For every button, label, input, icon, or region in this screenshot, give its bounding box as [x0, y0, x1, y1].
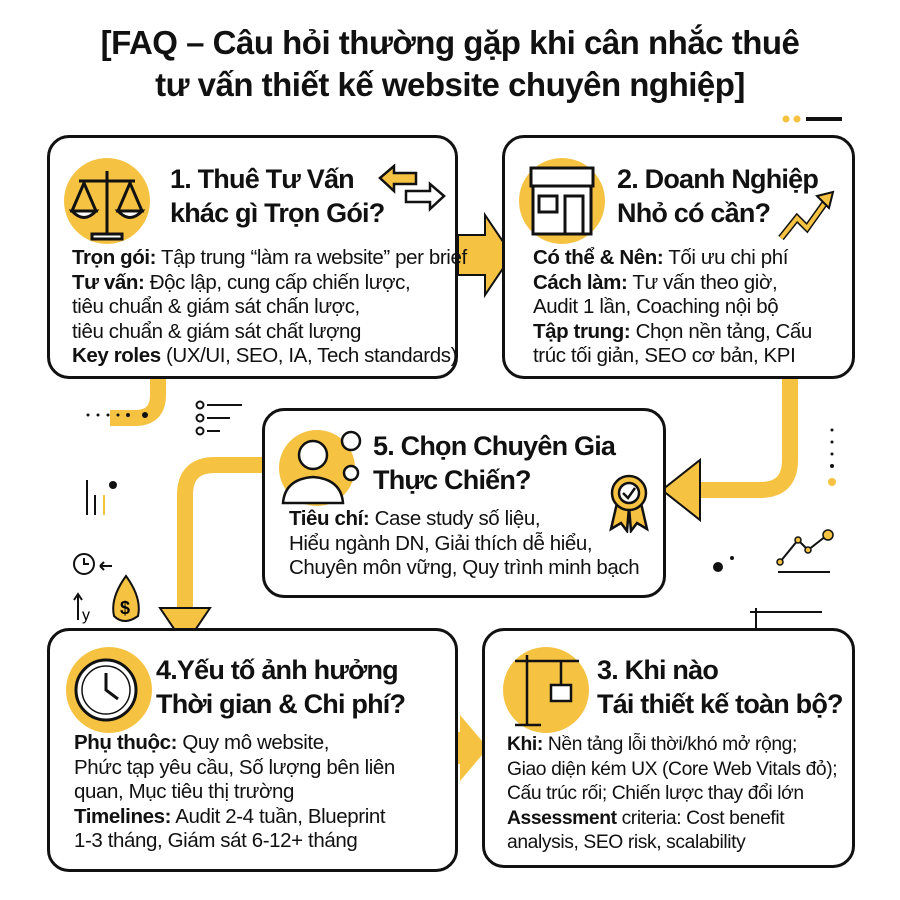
text: Cách làm: Tư vấn theo giờ, — [533, 270, 777, 294]
heading — [597, 655, 843, 719]
icon: crane — [503, 647, 589, 733]
panel 5 — [262, 408, 666, 598]
icon: shop — [519, 158, 605, 244]
icon: money bag: $ — [120, 598, 130, 618]
text — [507, 733, 837, 853]
decorative list icon — [86, 400, 242, 515]
panel 1 — [47, 135, 458, 379]
icon: clock — [66, 647, 152, 733]
text: Phức tạp yêu cầu, Số lượng bên liên — [74, 756, 395, 778]
icon: money bag: y — [82, 607, 90, 624]
text: Trọn gói: Tập trung “làm ra website” per brief — [72, 246, 467, 269]
icon: expert — [279, 430, 362, 506]
heading: 3. Khi nào — [597, 655, 718, 685]
text: Audit 1 lần, Coaching nội bộ — [533, 295, 778, 318]
icon: growth arrow — [778, 190, 834, 240]
panel 2 — [502, 135, 855, 379]
text: Assessment criteria: Cost benefit — [507, 808, 784, 828]
text: Cấu trúc rối; Chiến lược thay đổi lớn — [507, 783, 804, 804]
icon: scales — [64, 158, 150, 244]
text: Chuyên môn vững, Quy trình minh bạch — [289, 556, 639, 579]
text: quan, Mục tiêu thị trường — [74, 780, 294, 803]
text: tiêu chuẩn & giám sát chấn lược, — [72, 295, 360, 318]
heading: Thực Chiến? — [373, 465, 531, 495]
heading — [617, 164, 818, 228]
heading — [156, 655, 405, 719]
icon: building crane — [750, 608, 822, 628]
title: tư vấn thiết kế website chuyên nghiệp] — [155, 66, 745, 103]
text: Hiểu ngành DN, Giải thích dễ hiểu, — [289, 532, 592, 554]
text: Key roles (UX/UI, SEO, IA, Tech standards) — [72, 344, 457, 367]
decorative chart right — [713, 428, 836, 573]
text — [72, 246, 468, 367]
text: Tư vấn: Độc lập, cung cấp chiến lược, — [72, 270, 410, 294]
text: Tiêu chí: Case study số liệu, — [289, 507, 540, 530]
heading: 1. Thuê Tư Vấn — [170, 164, 354, 194]
text — [289, 507, 639, 579]
heading: 2. Doanh Nghiệp — [617, 164, 818, 194]
heading: Tái thiết kế toàn bộ? — [597, 689, 843, 719]
text — [74, 731, 395, 852]
text: 1-3 tháng, Giám sát 6-12+ tháng — [74, 829, 357, 852]
icon: money bag — [73, 553, 140, 624]
text: Phụ thuộc: Quy mô website, — [74, 731, 329, 754]
text: Tập trung: Chọn nền tảng, Cấu — [533, 320, 812, 342]
text: Timelines: Audit 2-4 tuần, Blueprint — [74, 804, 385, 828]
text — [533, 246, 812, 367]
heading: khác gì Trọn Gói? — [170, 198, 384, 228]
icon: swap arrows — [378, 164, 446, 212]
heading: Nhỏ có cần? — [617, 198, 770, 228]
title — [101, 24, 799, 103]
heading: Thời gian & Chi phí? — [156, 689, 405, 719]
panel 3 — [482, 628, 855, 868]
heading — [170, 164, 384, 228]
icon: badge — [609, 474, 649, 533]
decorative dots top right — [782, 116, 842, 122]
text: Khi: Nền tảng lỗi thời/khó mở rộng; — [507, 734, 797, 755]
text: Giao diện kém UX (Core Web Vitals đỏ); — [507, 758, 837, 780]
panel 4 — [47, 628, 458, 872]
heading — [373, 431, 616, 495]
text: tiêu chuẩn & giám sát chất lượng — [72, 320, 361, 342]
text: trúc tối giản, SEO cơ bản, KPI — [533, 344, 795, 367]
text: analysis, SEO risk, scalability — [507, 832, 745, 853]
heading: 5. Chọn Chuyên Gia — [373, 431, 615, 461]
text: Có thể & Nên: Tối ưu chi phí — [533, 246, 788, 269]
heading: 4.Yếu tố ảnh hưởng — [156, 655, 398, 685]
title: [FAQ – Câu hỏi thường gặp khi cân nhắc thuê — [101, 24, 799, 61]
